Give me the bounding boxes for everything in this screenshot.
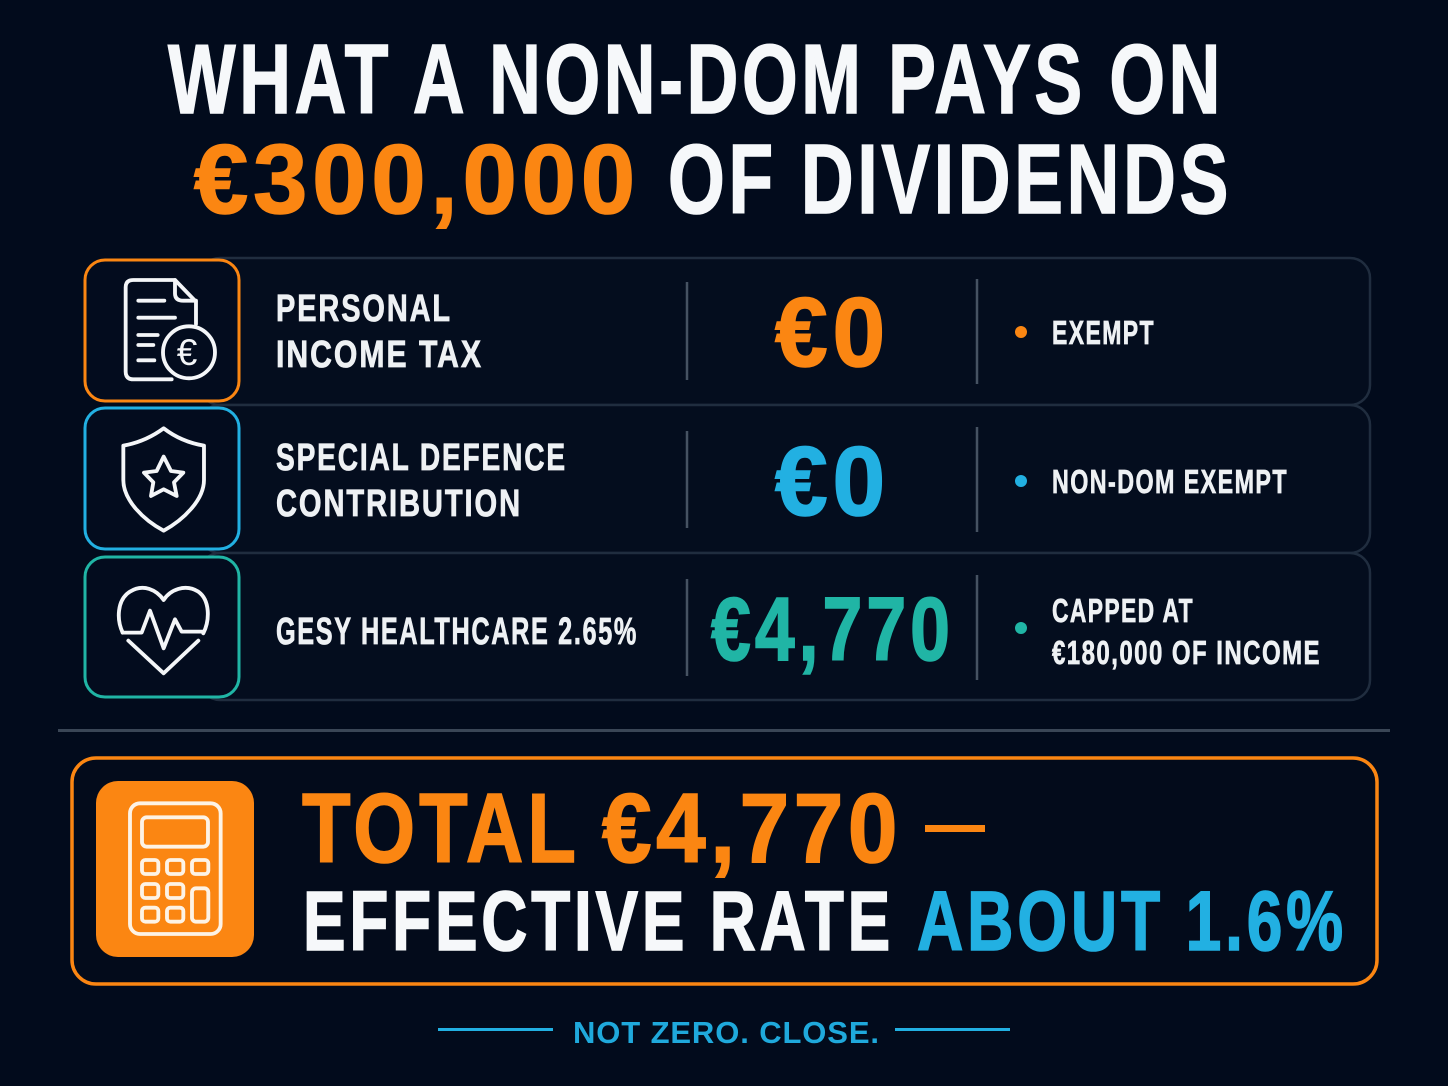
icon: calculator bbox=[96, 781, 254, 957]
total amount headline bbox=[302, 773, 985, 883]
value: 0 euro orange: €0 bbox=[775, 277, 890, 387]
title: OF DIVIDENDS bbox=[668, 124, 1232, 234]
note: non-dom exempt bbox=[1015, 463, 1288, 500]
note: capped at 180,000 euro of income: €180,000 OF INCOME bbox=[1052, 634, 1321, 671]
panel: special defence contribution bbox=[85, 405, 1370, 553]
label: gesy healthcare: GESY HEALTHCARE 2.65% bbox=[276, 611, 638, 653]
effective rate headline: EFFECTIVE RATE bbox=[303, 874, 894, 968]
note: exempt: EXEMPT bbox=[1052, 314, 1155, 351]
label: special defence contribution bbox=[276, 437, 567, 525]
label: special defence contribution: CONTRIBUTION bbox=[276, 483, 522, 525]
total amount headline: €4,770 bbox=[602, 773, 902, 883]
value: 4,770 euro teal: €4,770 bbox=[711, 580, 954, 680]
total amount headline: TOTAL bbox=[302, 773, 580, 883]
label: personal income tax: INCOME TAX bbox=[276, 334, 483, 376]
tagline: NOT ZERO. CLOSE. bbox=[573, 1015, 879, 1050]
value: 0 euro blue: €0 bbox=[775, 426, 890, 536]
title: €300,000 bbox=[194, 124, 640, 234]
label: personal income tax bbox=[276, 288, 483, 376]
title bbox=[168, 24, 1232, 234]
panel: personal income tax bbox=[85, 258, 1370, 405]
note: exempt bbox=[1015, 314, 1155, 351]
note: capped at 180,000 euro of income bbox=[1015, 592, 1321, 671]
panel: gesy healthcare bbox=[85, 553, 1370, 700]
icon: tax document with euro bbox=[85, 260, 239, 401]
icon: tax document with euro: € bbox=[177, 332, 198, 373]
icon: shield with star bbox=[85, 408, 239, 549]
label: special defence contribution: SPECIAL DEFENCE bbox=[276, 437, 567, 479]
panel: total callout bbox=[72, 758, 1377, 984]
note: non-dom exempt: NON-DOM EXEMPT bbox=[1052, 463, 1288, 500]
label: personal income tax: PERSONAL bbox=[276, 288, 452, 330]
note: capped at 180,000 euro of income: CAPPED AT bbox=[1052, 592, 1194, 629]
icon: heart with pulse bbox=[85, 557, 239, 697]
tagline bbox=[438, 1015, 1010, 1050]
